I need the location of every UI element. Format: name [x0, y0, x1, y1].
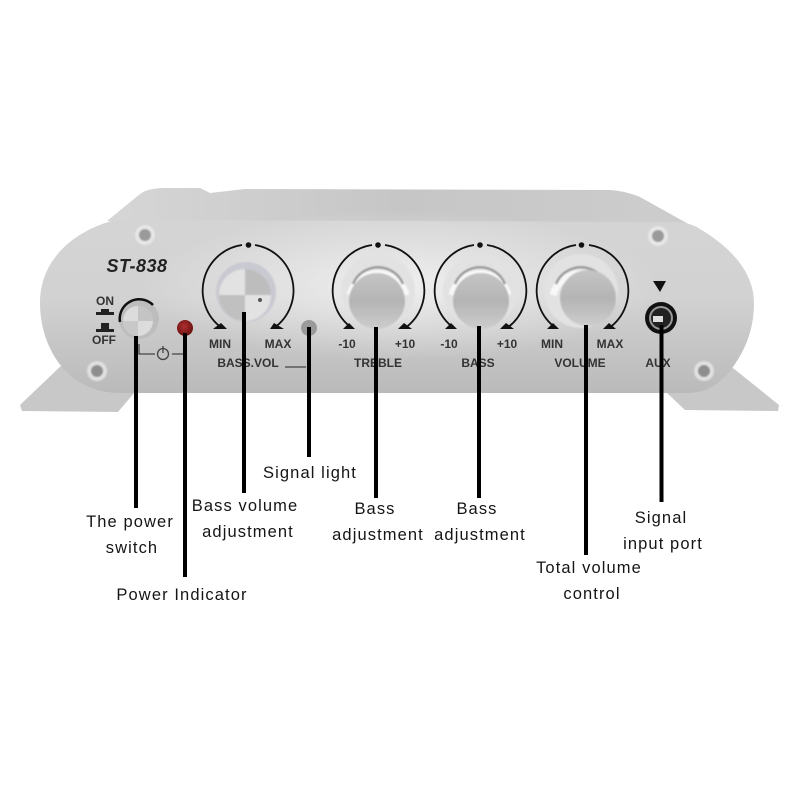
label: total volume control: Total volume [536, 559, 642, 577]
bass volume dial: MAX [265, 337, 291, 351]
right mounting foot [666, 368, 779, 411]
label: the power switch: switch [106, 539, 158, 557]
bass dial: BASS [461, 356, 495, 370]
front panel [40, 220, 754, 393]
leader line: power indicator [183, 333, 187, 577]
label: bass volume adjustment: adjustment [202, 523, 294, 541]
screw bottom right [694, 361, 714, 381]
amplifier body [20, 188, 779, 412]
model label: ST-838 [106, 256, 168, 276]
leader line: bass [477, 326, 481, 498]
label: bass adjustment (bass knob): Bass [456, 500, 498, 518]
label: bass volume adjustment: Bass volume [192, 497, 298, 515]
top housing [107, 188, 692, 226]
volume dial: MAX [597, 337, 623, 351]
leader line: bass volume [242, 312, 246, 493]
bass dial: -10 [440, 337, 458, 351]
label: power indicator: Power Indicator [116, 586, 248, 604]
power symbol wiring [139, 344, 184, 360]
leader line: signal input [660, 325, 664, 502]
leader line: treble [374, 327, 378, 498]
power switch knob [119, 299, 159, 339]
bass vol label: BASS.VOL [217, 356, 279, 370]
volume dial: MIN [541, 337, 563, 351]
leader line: power switch [134, 336, 138, 508]
bass dial [435, 242, 526, 370]
left mounting foot [20, 363, 134, 412]
bass volume dial [203, 242, 294, 351]
treble dial: -10 [338, 337, 356, 351]
power switch markings: OFF [92, 333, 116, 347]
label: total volume control: control [563, 585, 621, 603]
label: bass adjustment (bass knob): adjustment [434, 526, 526, 544]
volume dial: VOLUME [554, 356, 606, 370]
bass dial: +10 [497, 337, 518, 351]
screw top right [648, 226, 668, 246]
label: bass adjustment (treble knob): Bass [354, 500, 396, 518]
screw bottom left [87, 361, 107, 381]
bass volume dial: MIN [209, 337, 231, 351]
aux input jack: AUX [645, 356, 671, 370]
treble dial [333, 242, 424, 370]
aux input jack [645, 281, 677, 370]
screw top left [135, 225, 155, 245]
leader line: total volume [584, 325, 588, 555]
power switch markings [92, 294, 116, 347]
panel light glow [140, 210, 660, 360]
label: signal input port: input port [623, 535, 703, 553]
label: bass adjustment (treble knob): adjustment [332, 526, 424, 544]
treble dial: TREBLE [354, 356, 402, 370]
label: signal light: Signal light [263, 464, 357, 482]
power indicator LED [177, 320, 193, 336]
leader line: signal light [307, 327, 311, 457]
signal light [301, 320, 317, 336]
treble dial: +10 [395, 337, 416, 351]
power switch markings: ON [96, 294, 114, 308]
label: the power switch: The power [86, 513, 174, 531]
volume dial [537, 242, 628, 370]
label: signal input port: Signal [635, 509, 687, 527]
